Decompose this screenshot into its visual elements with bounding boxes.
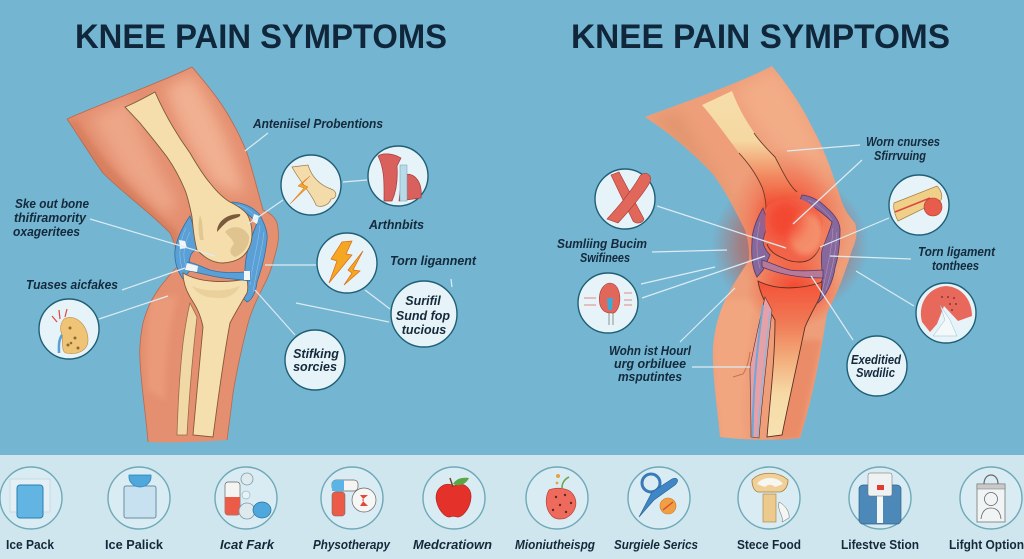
- condyle lower outline: [767, 244, 820, 262]
- item: Physotherapy: Physotherapy: [313, 538, 391, 552]
- item: Surgiele Serics: Surgiele Serics: [614, 538, 698, 552]
- callout lines: left: [90, 133, 452, 335]
- panel: inflamed knee diagram: [645, 66, 866, 440]
- icon: bone with red ball: [889, 175, 949, 235]
- item: Lifestve Stion: Lifestve Stion: [841, 538, 919, 552]
- item: Lifestve Stion: [841, 467, 919, 552]
- callout: Stifking: [285, 330, 345, 390]
- item: Ice Pack: Ice Pack: [6, 538, 54, 552]
- meniscus ligament band: [186, 262, 250, 281]
- label: [557, 237, 647, 265]
- item: Icat Fark: [215, 467, 277, 552]
- callout: Exeditied: Swdilic: [856, 366, 895, 380]
- callout: Stifking: Stifking: [293, 347, 339, 361]
- callout lines: right: [641, 145, 914, 367]
- label: Worn cnurses: [866, 135, 940, 149]
- calf fold: [733, 352, 750, 377]
- title: right: KNEE PAIN SYMPTOMS: [571, 18, 950, 56]
- condyle highlight: [789, 213, 823, 255]
- panel: healthy knee diagram: [66, 66, 279, 442]
- item: Mioniutheispg: Mioniutheispg: [515, 538, 595, 552]
- label: Sfirrvuing: [874, 149, 926, 163]
- callout: Exeditied: Exeditied: [851, 353, 901, 367]
- icon: crossed bones: [595, 169, 655, 229]
- item: Surgiele Serics: [614, 467, 698, 552]
- icon: inflamed joint: [578, 273, 638, 333]
- callout: Exeditied: [847, 336, 907, 396]
- callout: Surifil: [391, 281, 457, 347]
- bone: fibula: [177, 303, 197, 435]
- femur shaft outline: [739, 133, 797, 210]
- meniscus band: purple: [762, 260, 823, 278]
- label: [918, 245, 996, 273]
- label: Swifinees: [580, 251, 630, 265]
- item: Stece Food: Stece Food: [737, 538, 801, 552]
- item: Medcratiown: Medcratiown: [413, 538, 492, 552]
- label: Torn ligannent: [390, 254, 477, 268]
- label: Ske out bone: [15, 197, 89, 211]
- bone: tibia: [758, 281, 822, 437]
- label: thifiramority: [14, 211, 87, 225]
- label: oxageritees: [13, 225, 80, 239]
- item: Mioniutheispg: [515, 467, 595, 552]
- icon: red joint: [368, 146, 428, 206]
- inflammation: hot area: [736, 155, 844, 280]
- label: Sumliing Bucim: [557, 237, 647, 251]
- item: Stece Food: [737, 467, 801, 552]
- bone: femur shaft: [702, 91, 804, 210]
- item: Lifght Option: [949, 467, 1024, 552]
- bone: femur condyle: [765, 198, 823, 262]
- callout: Surifil: Surifil: [405, 294, 441, 308]
- item: Medcratiown: [413, 467, 492, 552]
- glow outside: [712, 173, 868, 317]
- bone: tibia: [183, 273, 248, 437]
- icon: two bolts: [317, 233, 377, 293]
- bone: femur: [125, 92, 252, 263]
- label: [13, 197, 89, 239]
- title: left: KNEE PAIN SYMPTOMS: [75, 18, 447, 56]
- label: [866, 135, 940, 163]
- label: Arthnbits: [368, 218, 424, 232]
- ligaments: purple: [752, 195, 840, 303]
- ligament ring: blue: [175, 202, 267, 302]
- bright centre: [767, 200, 803, 240]
- icon: bone with bolt: [281, 155, 341, 215]
- label: tonthees: [932, 259, 979, 273]
- icon: torn tissue: [916, 283, 976, 343]
- tibia shading: [192, 286, 240, 298]
- ligament tips: [179, 214, 259, 280]
- item: Ice Palick: Ice Palick: [105, 538, 163, 552]
- callout: Stifking: sorcies: [293, 360, 337, 374]
- leg: skin: [645, 66, 856, 440]
- leg: skin: [68, 68, 278, 442]
- panel: treatment strip: [0, 455, 1024, 559]
- label: Wohn ist Hourl: [609, 344, 691, 358]
- callout: Surifil: tucious: [402, 323, 446, 337]
- callout: Surifil: Sund fop: [396, 309, 450, 323]
- condyle shading: [217, 214, 240, 232]
- label: Torn ligament: [918, 245, 996, 259]
- ligament fibres: [180, 205, 264, 292]
- purple fibres: [757, 200, 837, 292]
- item: Icat Fark: Icat Fark: [220, 538, 275, 552]
- item: Physotherapy: [313, 467, 391, 552]
- label: msputintes: [618, 370, 682, 384]
- label: Anteniisel Probentions: [252, 117, 383, 131]
- item: Ice Palick: [105, 467, 170, 552]
- icon: swollen joint: [39, 299, 99, 359]
- item: Ice Pack: [0, 467, 62, 552]
- leg: outline: [67, 67, 278, 442]
- label: Tuases aicfakes: [26, 278, 118, 292]
- label: [609, 344, 691, 384]
- label: urg orbiluee: [614, 357, 686, 371]
- nerve and vessels: [750, 297, 772, 438]
